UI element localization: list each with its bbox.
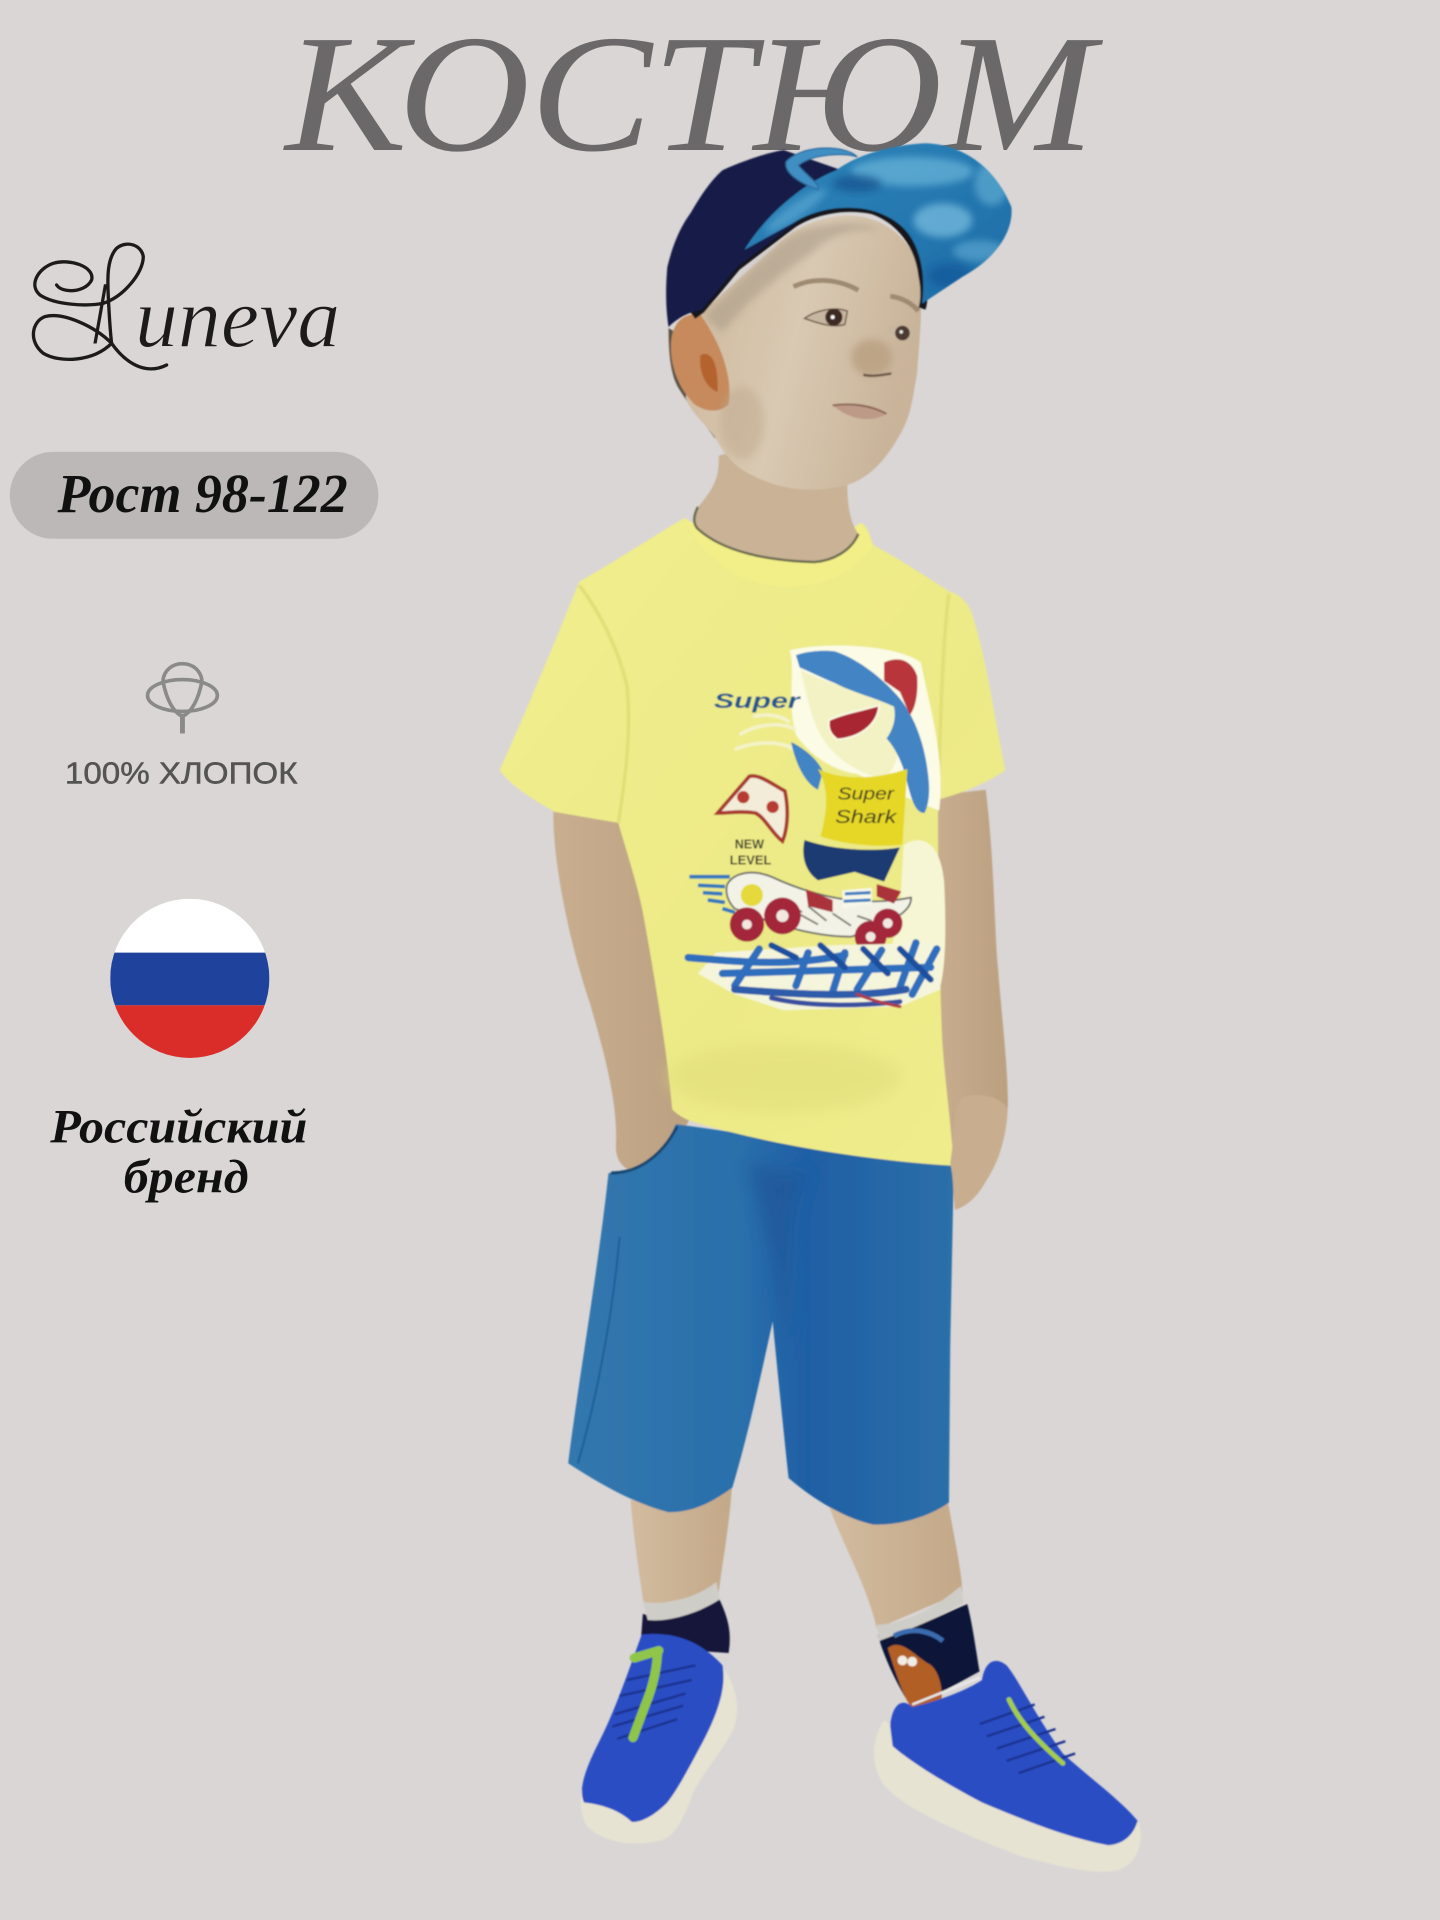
mouth bbox=[829, 705, 879, 740]
right sock bbox=[877, 1586, 980, 1711]
t-shirt bbox=[500, 518, 1005, 1166]
wheels bbox=[730, 907, 764, 942]
hat edge band bbox=[693, 208, 924, 316]
graffiti lettering bbox=[688, 943, 937, 1007]
brand logo: Luneva: uneva bbox=[135, 270, 340, 366]
neckline bbox=[694, 507, 858, 562]
face bbox=[686, 216, 921, 490]
sole bbox=[580, 1668, 737, 1843]
nose bbox=[851, 339, 893, 376]
hand on right side bbox=[950, 1095, 1008, 1210]
left arm bbox=[553, 784, 698, 1172]
fin on cap bbox=[786, 148, 857, 190]
graffiti backing bbox=[698, 943, 940, 1010]
blue upper bbox=[890, 1661, 1138, 1845]
pale sketch lines bbox=[735, 715, 796, 749]
hair at nape bbox=[669, 328, 735, 438]
left sock bbox=[640, 1582, 730, 1653]
icon: Russian flag bbox=[110, 899, 269, 1058]
bandana bbox=[884, 659, 917, 715]
right arm bbox=[931, 790, 1008, 1210]
cheek shadow bbox=[720, 386, 764, 459]
sneakers and stripes bbox=[806, 889, 833, 912]
pale patch right bbox=[888, 840, 945, 986]
fin arm bbox=[791, 742, 823, 790]
print: shark skateboarder: LEVEL bbox=[730, 852, 772, 867]
mouth bbox=[833, 404, 887, 419]
deck pattern bbox=[784, 900, 872, 926]
height badge: Рост 98-122 bbox=[57, 463, 348, 524]
title: КОСТЮМ bbox=[283, 2, 1104, 187]
speed lines bbox=[689, 877, 735, 912]
crotch shadow bbox=[747, 1163, 808, 1359]
collar rib bbox=[684, 518, 873, 587]
icon: cotton bbox=[148, 664, 217, 733]
height badge bbox=[10, 452, 378, 539]
cap bbox=[666, 143, 1012, 327]
shark shorts bbox=[803, 840, 900, 882]
photo: boy in outfit bbox=[500, 143, 1141, 1872]
left shoe bbox=[580, 1634, 737, 1843]
eyebrows bbox=[793, 280, 858, 290]
Russian brand caption: бренд bbox=[124, 1151, 249, 1204]
brand logo: Luneva bbox=[33, 244, 340, 369]
controller bbox=[718, 776, 787, 841]
shark tee bbox=[818, 769, 907, 846]
stubble bbox=[704, 223, 882, 333]
skateboard bbox=[726, 873, 911, 937]
Russian brand caption: Российский bbox=[49, 1100, 307, 1153]
head bbox=[669, 208, 924, 490]
laces bbox=[612, 1665, 696, 1739]
sole bbox=[874, 1720, 1141, 1872]
shorts bbox=[568, 1124, 954, 1525]
sleeve seam bbox=[579, 585, 629, 823]
pocket shadow bbox=[611, 1127, 677, 1173]
right shoe bbox=[874, 1661, 1141, 1872]
print: shark skateboarder bbox=[688, 645, 945, 1010]
cotton badge: 100% ХЛОПОК bbox=[65, 757, 298, 791]
neck bbox=[694, 441, 858, 562]
green lace bbox=[1009, 1700, 1063, 1763]
shark tee lettering: Super bbox=[838, 784, 895, 804]
ear bbox=[671, 314, 729, 411]
laces bbox=[980, 1704, 1075, 1773]
small print lettering: Super bbox=[714, 690, 802, 713]
deck smiley bbox=[741, 884, 763, 906]
brim bbox=[744, 143, 1012, 304]
sock character bbox=[888, 1645, 942, 1709]
pale halo bbox=[790, 645, 941, 811]
brim clouds bbox=[762, 157, 1009, 288]
eyes bbox=[804, 309, 847, 326]
crown bbox=[666, 150, 845, 327]
print: shark skateboarder: Shark bbox=[835, 806, 897, 827]
body shade bbox=[667, 1043, 900, 1112]
shark head blue bbox=[796, 651, 929, 813]
cotton badge bbox=[65, 664, 298, 791]
print: shark skateboarder: NEW bbox=[735, 837, 765, 852]
green lace bbox=[633, 1651, 659, 1738]
Russian brand caption bbox=[49, 1100, 307, 1204]
shark face bbox=[801, 670, 900, 779]
brand logo: Luneva: L bbox=[81, 258, 138, 369]
legs bbox=[631, 1482, 962, 1629]
blue upper bbox=[582, 1634, 724, 1822]
side seam bbox=[578, 1237, 620, 1463]
